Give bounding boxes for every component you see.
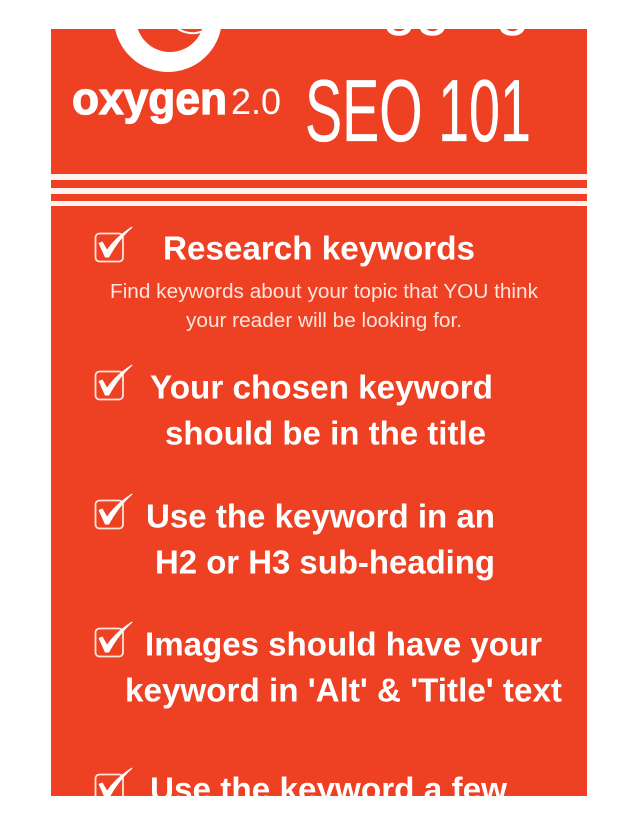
- logo wordmark: 2.0: [231, 81, 281, 122]
- logo wordmark: oxygen: [72, 73, 227, 124]
- heading: Images should have your: [145, 626, 542, 662]
- heading: Use the keyword in an: [146, 498, 495, 534]
- item 5: clipped keyword usage: [94, 768, 508, 796]
- heading: [150, 374, 491, 445]
- heading: Use the keyword a few: [150, 770, 507, 808]
- item 3: keyword in sub-heading: [96, 494, 495, 580]
- item 1: research keywords: [96, 226, 539, 332]
- heading: should be in the title: [165, 414, 486, 452]
- icon: checkbox: [96, 226, 132, 262]
- description: your reader will be looking for.: [186, 309, 462, 332]
- icon: checkbox: [96, 364, 132, 400]
- icon: checkbox: [96, 494, 132, 528]
- heading: [125, 626, 562, 708]
- icon: checkbox: [94, 768, 132, 796]
- heading: H2 or H3 sub-heading: [155, 544, 495, 580]
- description: Find keywords about your topic that YOU think: [110, 280, 539, 303]
- heading: [146, 498, 495, 580]
- heading: Your chosen keyword: [150, 368, 493, 406]
- icon: checkbox: [96, 622, 132, 656]
- heading: Research keywords: [163, 230, 475, 266]
- item 4: image alt and title: [96, 622, 562, 708]
- description: [110, 280, 539, 332]
- icon: oxygen logo ring: [115, 29, 221, 72]
- divider stripes: [51, 174, 587, 206]
- logo wordmark: [73, 88, 280, 124]
- heading: keyword in 'Alt' & 'Title' text: [125, 672, 562, 708]
- item 2: keyword in title: [96, 364, 493, 452]
